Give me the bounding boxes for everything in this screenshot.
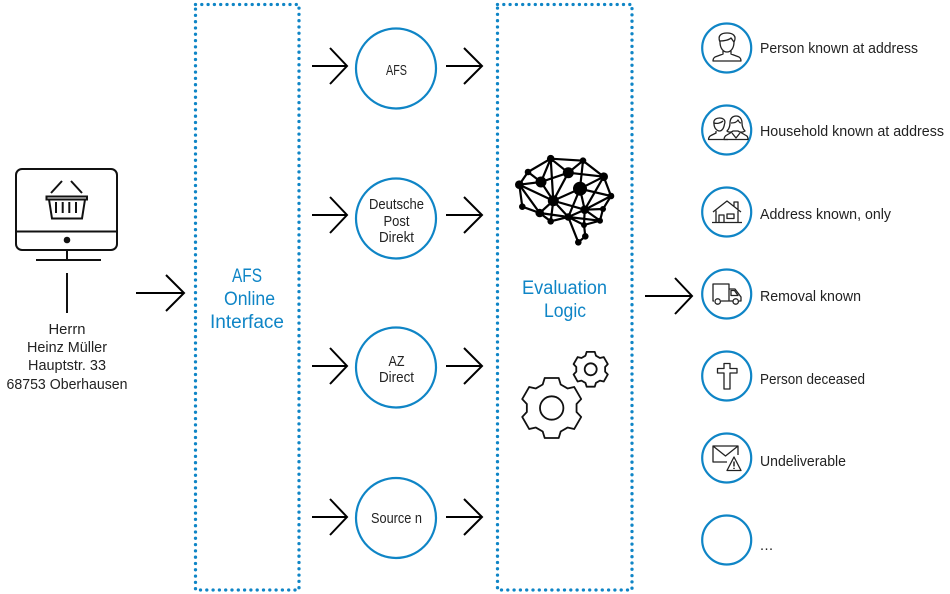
source: Deutsche Post Direkt: Direkt (379, 230, 414, 246)
result: undeliverable (702, 434, 846, 482)
source: Source n: Source n (371, 511, 422, 527)
icon: computer with shopping basket (16, 169, 117, 260)
panel: Evaluation Logic (498, 4, 632, 590)
result: household known at address (702, 106, 944, 154)
panel: AFS Online Interface: Online (224, 289, 275, 310)
icon: neural network brain (515, 155, 614, 246)
icon: house (712, 201, 742, 222)
source: AZ Direct: Direct (379, 370, 414, 386)
arrow: address to interface (136, 275, 184, 311)
icon: couple (708, 116, 748, 140)
arrows: sources to evaluation (446, 48, 482, 535)
panel: Evaluation Logic: Logic (544, 301, 586, 322)
source: AFS (356, 28, 436, 108)
text: postal address: Heinz Müller (27, 340, 107, 356)
source: AZ Direct: AZ (388, 354, 405, 370)
icon: truck (713, 284, 741, 304)
source: Deutsche Post Direkt (356, 178, 436, 258)
panel: AFS Online Interface: AFS (232, 266, 262, 287)
source: AFS: AFS (386, 63, 407, 79)
icon: person (713, 33, 741, 61)
result: household known at address: Household known at address (760, 124, 944, 140)
result: removal known (702, 270, 861, 318)
source: Source n (356, 478, 436, 558)
icon: small gear (574, 352, 608, 387)
text: postal address: 68753 Oberhausen (6, 377, 128, 393)
result: person known at address (702, 24, 918, 72)
text: postal address: Hauptstr. 33 (28, 358, 106, 374)
source: AZ Direct (356, 328, 436, 408)
text: postal address (6, 322, 128, 393)
result: address known, only: Address known, only (760, 207, 892, 223)
source: Deutsche Post Direkt: Post (384, 214, 410, 230)
icon: cross (718, 364, 737, 389)
result: person known at address: Person known at address (760, 41, 918, 57)
arrows: interface to sources (312, 48, 347, 535)
panel: AFS Online Interface: Interface (210, 312, 284, 333)
result: address known, only (702, 188, 892, 236)
result: undeliverable: Undeliverable (760, 454, 846, 470)
panel: Evaluation Logic: Evaluation (522, 278, 607, 299)
panel: AFS Online Interface (196, 4, 299, 590)
icon: large gear (522, 378, 581, 438)
result: further outcomes: ... (760, 538, 773, 554)
source: Deutsche Post Direkt: Deutsche (369, 197, 424, 213)
connector line (66, 273, 68, 313)
icon: envelope with warning (713, 446, 741, 470)
text: postal address: Herrn (48, 322, 86, 338)
result: person deceased (702, 352, 865, 400)
arrow: evaluation to results (645, 278, 692, 314)
result: person deceased: Person deceased (760, 372, 865, 388)
result: removal known: Removal known (760, 289, 861, 305)
result: further outcomes (702, 516, 773, 564)
